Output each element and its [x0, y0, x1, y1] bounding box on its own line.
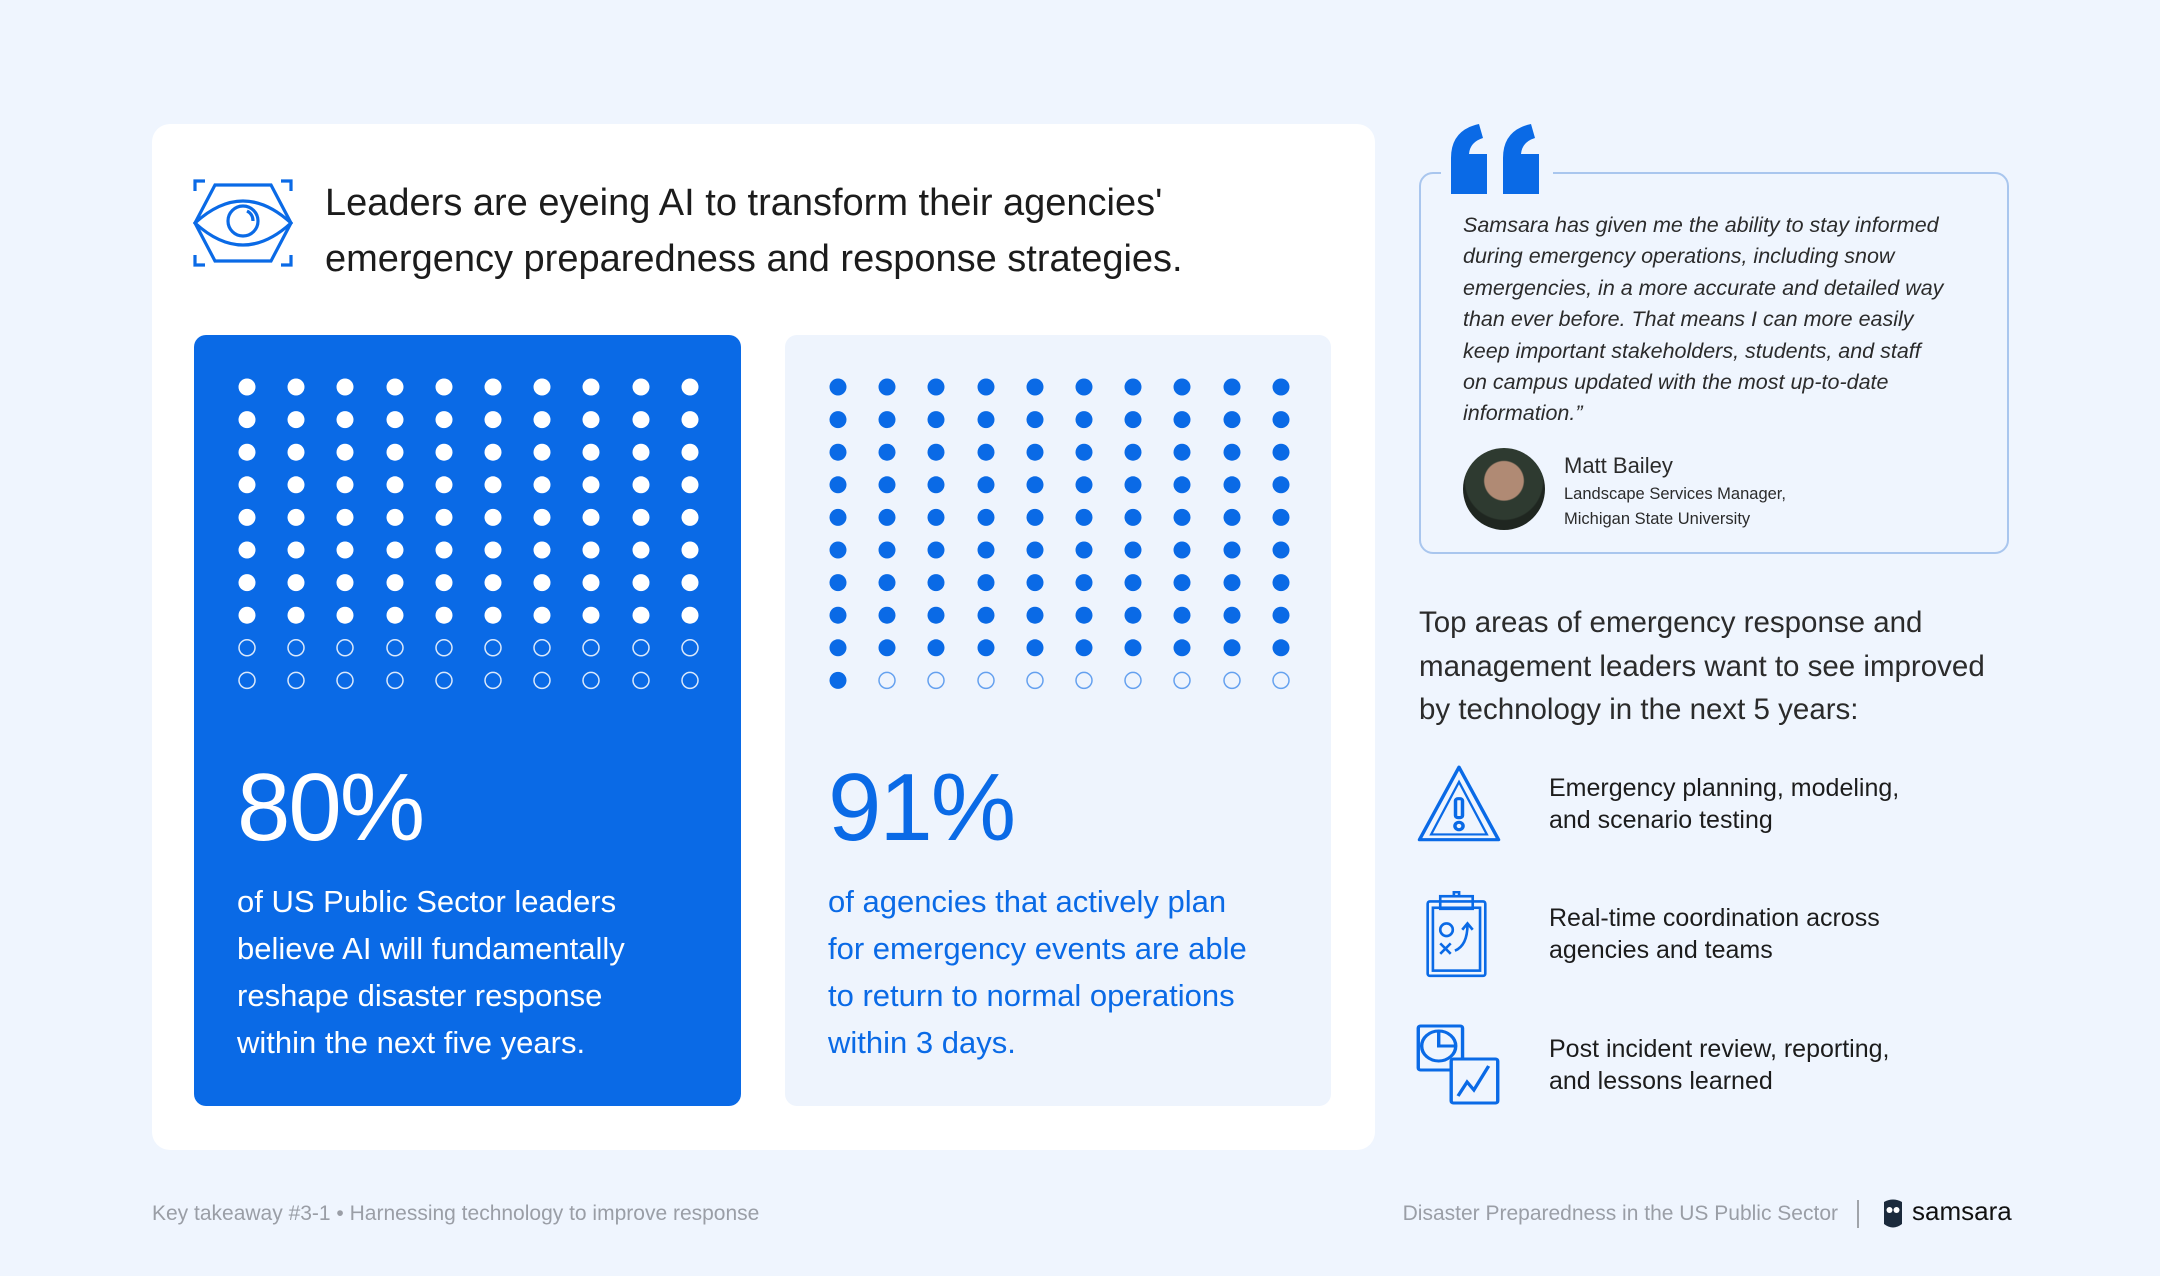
icon: warning triangle: [1418, 766, 1500, 842]
stat description: of US Public Sector leaders: [237, 884, 616, 919]
item text: and lessons learned: [1549, 1067, 1773, 1095]
list item: review: [1416, 1024, 1889, 1104]
quote text: [1463, 213, 1944, 425]
item text: Emergency planning, modeling,: [1549, 774, 1899, 802]
list item: planning: [1418, 766, 1899, 842]
stat description: of agencies that actively plan: [828, 884, 1226, 919]
stat description: [237, 884, 625, 1060]
item text: agencies and teams: [1549, 936, 1773, 964]
icon: clipboard: [1426, 891, 1487, 978]
stat number: 80%: [237, 754, 423, 861]
avatar: [1463, 448, 1545, 530]
main card: [152, 124, 1375, 1150]
list item: coordination: [1426, 891, 1880, 978]
quote text: than ever before. That means I can more easily: [1463, 307, 1914, 331]
quote text: on campus updated with the most up-to-date: [1463, 370, 1888, 394]
quote text: keep important stakeholders, students, and staff: [1463, 339, 1921, 363]
heading: top areas: management leaders want to see improved: [1419, 650, 1985, 682]
attribution: Landscape Services Manager,: [1564, 485, 1786, 503]
quote text: emergencies, in a more accurate and detailed way: [1463, 276, 1943, 300]
item text: [1549, 774, 1899, 834]
icon: quote mark: [1441, 124, 1553, 194]
heading: top areas: Top areas of emergency response and: [1419, 606, 1922, 639]
stat description: believe AI will fundamentally: [237, 931, 625, 966]
logo: samsara: samsara: [1912, 1196, 2012, 1226]
icon: eye: [193, 179, 293, 267]
dot chart: 80 of 100: [238, 378, 699, 690]
panel: 80% stat: [194, 335, 741, 1106]
title: [325, 182, 1183, 280]
stat description: within 3 days.: [828, 1025, 1016, 1060]
quote text: Samsara has given me the ability to stay informed: [1463, 213, 1939, 237]
title: emergency preparedness and response strategies.: [325, 238, 1183, 280]
quote text: during emergency operations, including snow: [1463, 244, 1894, 268]
item text: Post incident review, reporting,: [1549, 1035, 1889, 1063]
icon: charts: [1416, 1024, 1500, 1104]
item text: [1549, 1035, 1889, 1095]
item text: and scenario testing: [1549, 806, 1773, 834]
footer right: Disaster Preparedness in the US Public Sector: [1403, 1202, 1838, 1225]
heading: top areas: [1419, 606, 1985, 726]
panel: quote: [1419, 172, 2009, 554]
panel: 91% stat: [785, 335, 1331, 1106]
title: Leaders are eyeing AI to transform their agencies': [325, 182, 1162, 224]
stat description: reshape disaster response: [237, 978, 602, 1013]
footer left: Key takeaway #3-1 • Harnessing technology to improve response: [152, 1202, 759, 1225]
dot chart: 91 of 100: [830, 378, 1290, 690]
stat description: for emergency events are able: [828, 931, 1247, 966]
quote text: information.”: [1463, 401, 1582, 425]
stat description: within the next five years.: [237, 1025, 585, 1060]
attribution: Michigan State University: [1564, 510, 1750, 528]
heading: top areas: by technology in the next 5 years:: [1419, 693, 1858, 726]
stat description: to return to normal operations: [828, 978, 1235, 1013]
item text: [1549, 904, 1880, 964]
attribution: Matt Bailey: [1564, 453, 1673, 478]
footer right: [1403, 1196, 2012, 1228]
stat number: 91%: [828, 754, 1014, 861]
attribution: [1564, 453, 1786, 528]
stat description: [828, 884, 1247, 1060]
item text: Real-time coordination across: [1549, 904, 1880, 932]
